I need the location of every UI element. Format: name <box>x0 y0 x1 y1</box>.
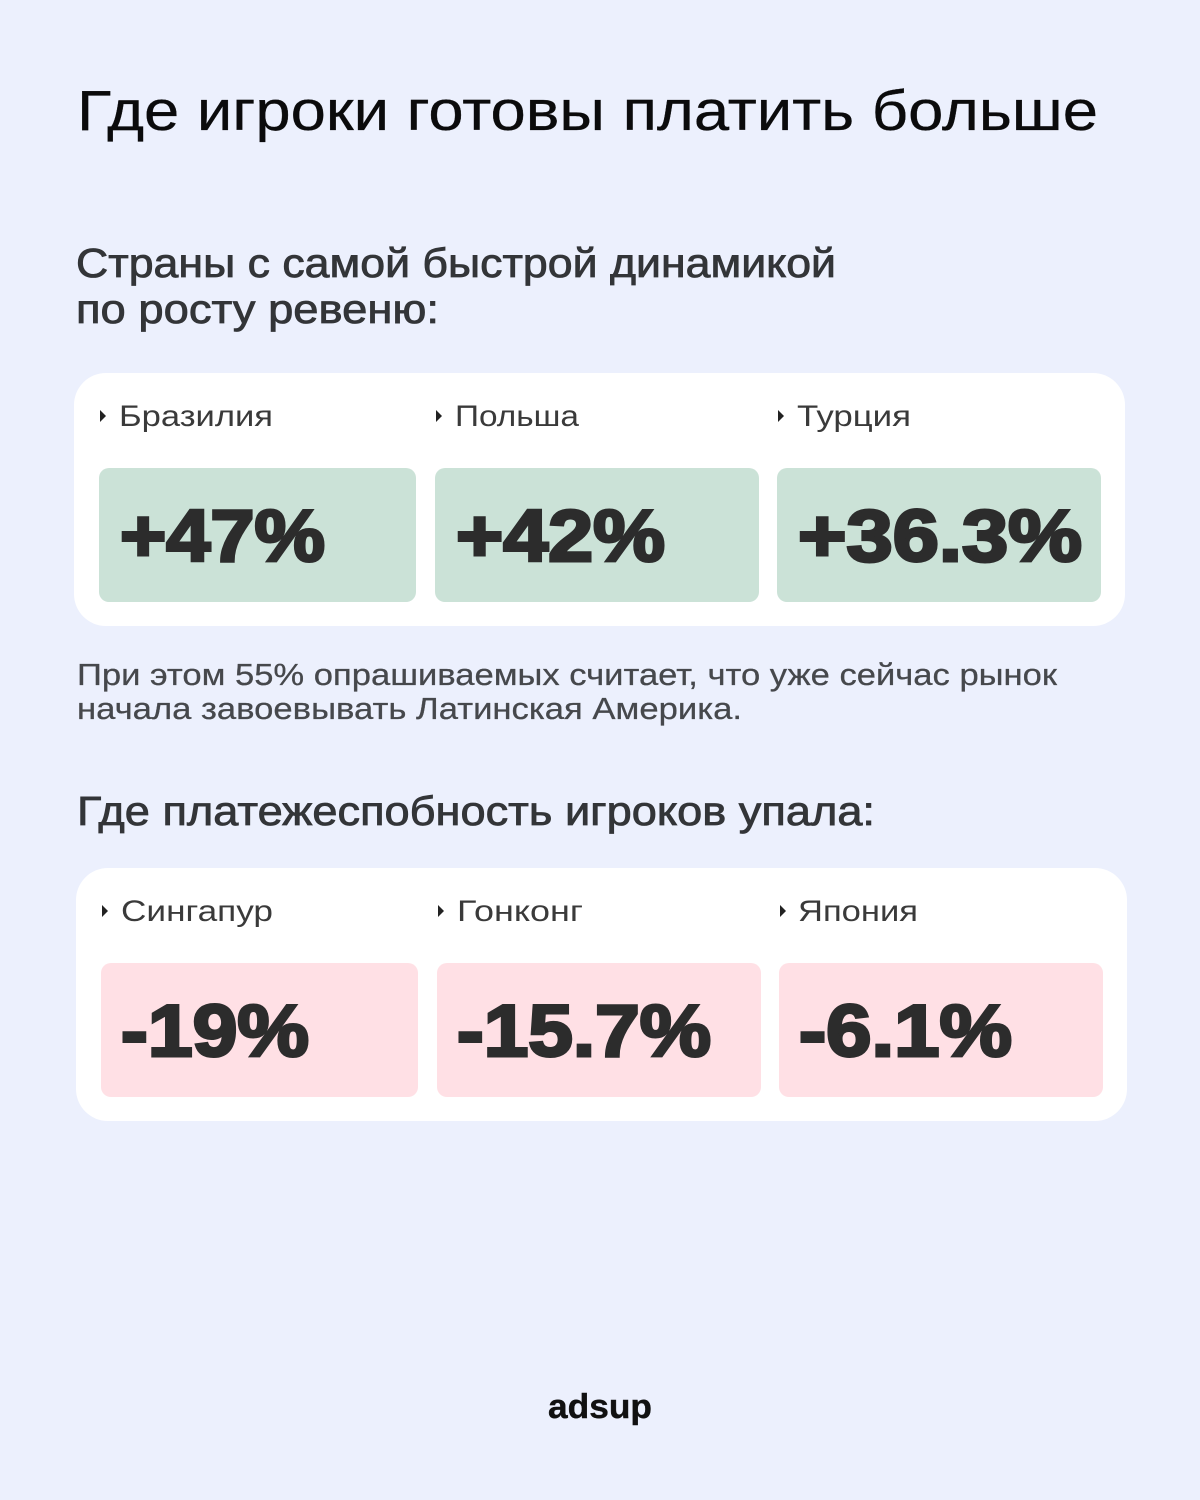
stat: Brazil <box>99 400 416 602</box>
stat: Turkey <box>777 400 1101 602</box>
text block: Latin America note: При этом 55% опрашиваемых считает, что уже сейчас рынок <box>77 657 1057 692</box>
stat: Turkey: Турция <box>797 400 911 433</box>
stat: Japan: Япония <box>798 895 918 928</box>
stat: Brazil: Бразилия <box>119 400 273 433</box>
heading: fastest revenue growth <box>76 240 836 332</box>
logo: adsup <box>548 1388 652 1426</box>
stat: Poland: +42% <box>456 496 665 577</box>
heading: fastest revenue growth: Страны с самой быстрой динамикой <box>76 240 836 286</box>
stat: Hong Kong: -15.7% <box>457 991 711 1072</box>
heading: fastest revenue growth: по росту ревеню: <box>76 286 439 332</box>
title: Где игроки готовы платить больше <box>77 79 1098 143</box>
stat: Singapore: -19% <box>121 991 309 1072</box>
panel: solvency decline <box>76 868 1127 1121</box>
stat: Poland: Польша <box>455 400 579 433</box>
heading: solvency decline: Где платежеспобность игроков упала: <box>77 788 875 834</box>
panel: revenue growth <box>74 373 1125 626</box>
stat: Turkey: +36.3% <box>798 496 1082 577</box>
stat: Japan: -6.1% <box>799 991 1012 1072</box>
stat: Singapore: Сингапур <box>121 895 273 928</box>
stat: Singapore <box>101 895 418 1097</box>
stat: Hong Kong: Гонконг <box>457 895 583 928</box>
stat: Japan <box>779 895 1103 1097</box>
stat: Hong Kong <box>437 895 761 1097</box>
text block: Latin America note <box>77 657 1057 726</box>
stat: Poland <box>435 400 759 602</box>
text block: Latin America note: начала завоевывать Латинская Америка. <box>77 691 742 726</box>
stat: Brazil: +47% <box>120 496 325 577</box>
